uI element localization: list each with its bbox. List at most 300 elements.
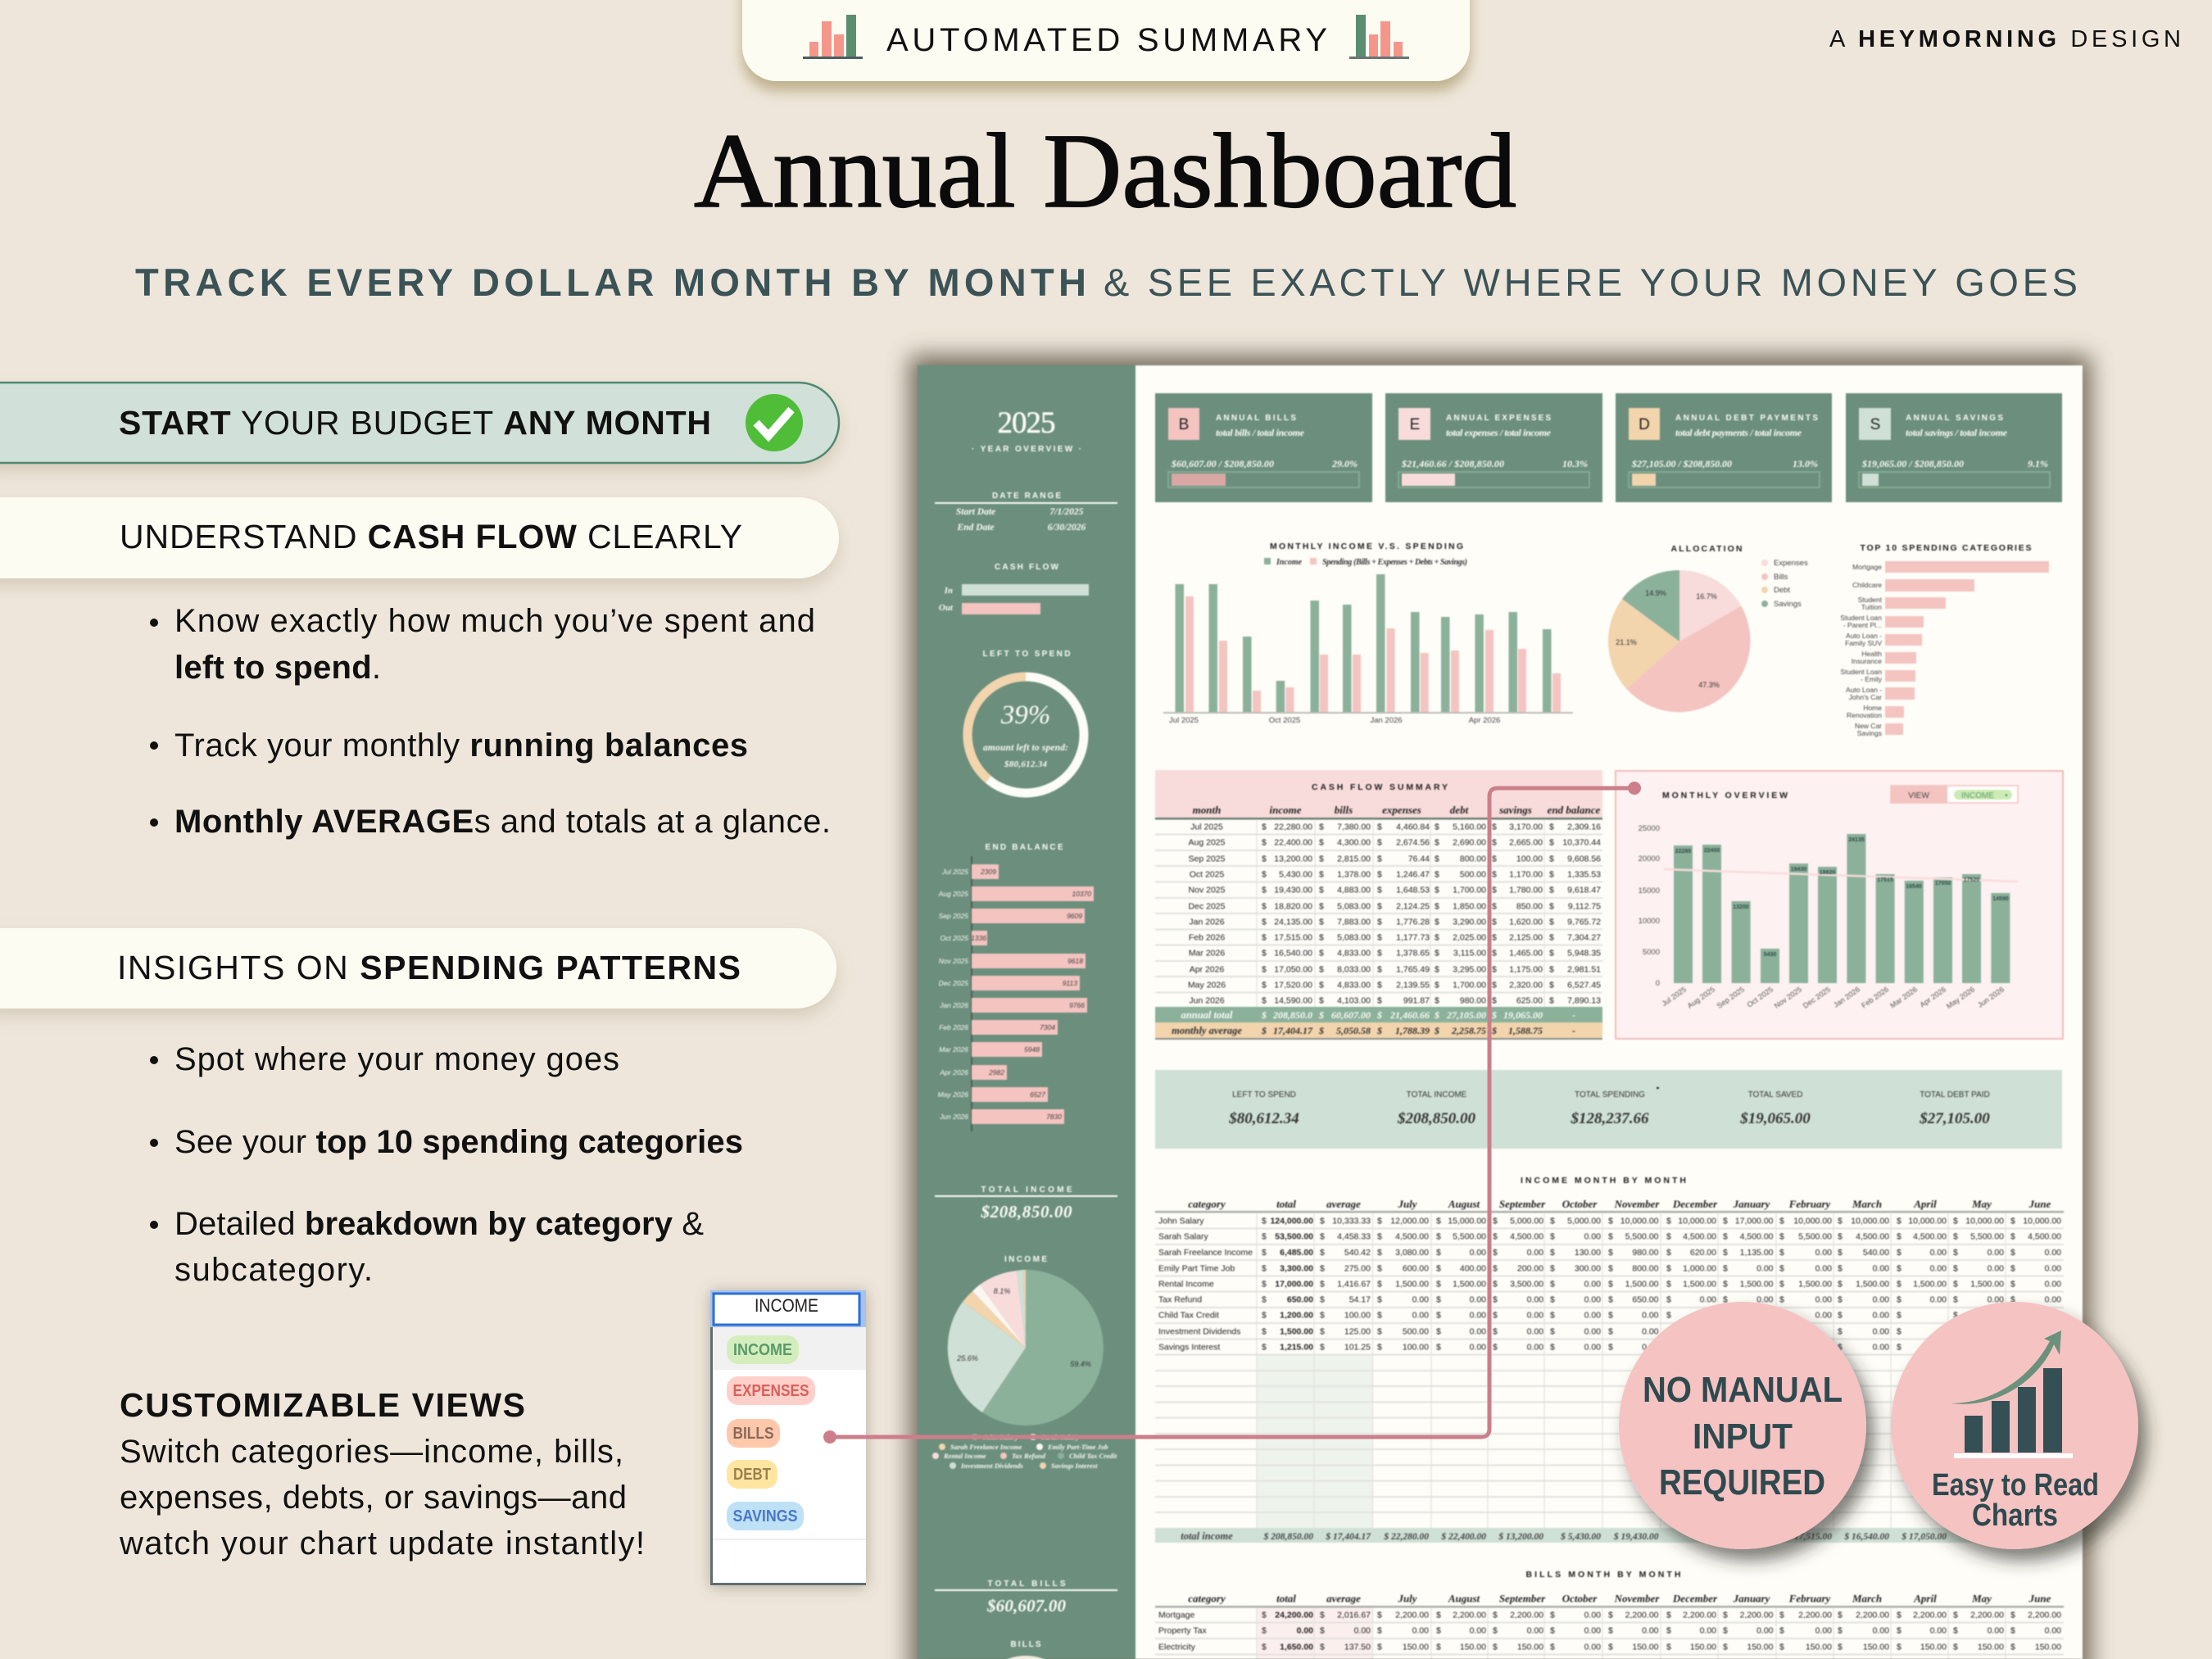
- table: cash flow summary: Mar 2026: [1189, 949, 1225, 959]
- badge: no manual input required: NO MANUAL: [1643, 1370, 1843, 1410]
- table: income month by month: 0.00: [1815, 1294, 1832, 1304]
- table: income month by month: 10,000.00: [1965, 1216, 2004, 1226]
- table: income month by month: 275.00: [1344, 1263, 1371, 1273]
- table: income month by month: 0.00: [1700, 1294, 1716, 1304]
- panel: totals band: TOTAL SAVED: [1748, 1090, 1802, 1099]
- chart: monthly overview: 5000: [1643, 948, 1660, 957]
- chart: top 10 spending categories: Family SUV: [1845, 639, 1882, 647]
- customizable views text: expenses, debts, or savings—and: [120, 1480, 627, 1516]
- table: income month by month: 1,200.00: [1280, 1311, 1313, 1321]
- chart: monthly overview: 14590: [1992, 896, 2009, 902]
- table: cash flow summary: $$$$$$: [1262, 870, 1554, 880]
- end balance bar chart: Apr 2026: [939, 1068, 968, 1077]
- table: cash flow summary: expenses: [1382, 804, 1421, 816]
- table: cash flow summary: 3,290.00: [1453, 918, 1486, 927]
- row: annual total: -: [1572, 1009, 1575, 1021]
- table: bills month by month: 0.00: [1584, 1642, 1601, 1652]
- bullet list: cash flow: [150, 603, 831, 840]
- chart: monthly overview: Feb 2026: [1860, 985, 1890, 1009]
- table: cash flow summary: 1,765.49: [1396, 965, 1430, 975]
- table: income month by month: August: [1448, 1198, 1480, 1210]
- chart: allocation pie: Savings: [1774, 600, 1802, 609]
- table: income month by month: 10,000.00: [2023, 1216, 2061, 1226]
- table: income month by month: 1,500.00: [1625, 1280, 1659, 1290]
- row: annual total: $$$$$: [1261, 1009, 1497, 1021]
- table: income month by month: 0.00: [1584, 1342, 1601, 1352]
- sidebar year heading: 2025: [998, 406, 1055, 440]
- table: income month by month: 1,500.00: [1970, 1280, 2004, 1290]
- table: bills month by month: 150.00: [1403, 1642, 1429, 1652]
- income pie legend: Savings Interest: [1051, 1462, 1098, 1470]
- table: cash flow summary: CASH FLOW SUMMARY: [1312, 782, 1448, 792]
- card: annual bills: $60,607.00 / $208,850.00: [1171, 458, 1274, 469]
- chart: top 10 spending categories: Student: [1858, 596, 1883, 604]
- sidebar year heading: · YEAR OVERVIEW ·: [972, 445, 1081, 454]
- table: bills month by month: 2,200.00: [2028, 1611, 2061, 1620]
- panel: totals band: $128,237.66: [1570, 1110, 1649, 1127]
- table: income month by month: Investment Dividends: [1158, 1327, 1240, 1337]
- customizable views text: [119, 1386, 645, 1562]
- table: income month by month: 5,500.00: [1625, 1232, 1659, 1242]
- table: cash flow summary: 980.00: [1460, 996, 1486, 1006]
- table: bills month by month: category: [1188, 1593, 1226, 1604]
- end balance bar chart: 9618: [1067, 957, 1083, 965]
- table: income month by month: $$$$$$$$$$$$$$: [1262, 1342, 2015, 1352]
- left to spend donut: LEFT TO SPEND: [983, 650, 1070, 659]
- subtitle: TRACK EVERY DOLLAR MONTH BY MONTH: [135, 261, 1086, 304]
- table: income month by month: 5,000.00: [1510, 1216, 1543, 1226]
- table: income month by month: 650.00: [1632, 1294, 1659, 1304]
- table: income month by month: average: [1326, 1198, 1361, 1210]
- card: annual bills: [1155, 393, 1372, 502]
- end balance bar chart: 2309: [980, 868, 996, 876]
- table: bills month by month: October: [1562, 1593, 1598, 1604]
- table: income month by month: 17,000.00: [1735, 1216, 1774, 1226]
- table: cash flow summary: 3,170.00: [1509, 823, 1543, 832]
- table: cash flow summary: 7,304.27: [1567, 932, 1601, 942]
- badge: no manual input required: INPUT: [1693, 1416, 1793, 1457]
- table: cash flow summary: 1,780.00: [1509, 885, 1543, 895]
- table: bills month by month: 0.00: [1756, 1625, 1774, 1635]
- table: cash flow summary: 1,170.00: [1509, 870, 1543, 880]
- table: cash flow summary: 100.00: [1516, 854, 1543, 863]
- total income: $208,850.00: [980, 1202, 1072, 1222]
- table: income month by month: 0.00: [1756, 1294, 1774, 1304]
- table: bills month by month: Property Tax: [1158, 1625, 1207, 1635]
- table: income month by month: [1155, 1176, 2064, 1543]
- table: cash flow summary: 800.00: [1460, 854, 1486, 863]
- chart: monthly overview: Oct 2025: [1745, 985, 1775, 1009]
- table: bills month by month: 0.00: [1815, 1625, 1832, 1635]
- table: bills month by month: 1,650.00: [1280, 1642, 1313, 1652]
- panel: totals band: $27,105.00: [1919, 1110, 1990, 1127]
- table: cash flow summary: $$$$$$: [1262, 932, 1554, 942]
- card: annual expenses: $21,460.66 / $208,850.00: [1401, 458, 1504, 469]
- table: income month by month: 0.00: [1930, 1263, 1947, 1273]
- table: cash flow summary: 2,815.00: [1337, 854, 1371, 863]
- card: annual savings: ANNUAL SAVINGS: [1906, 414, 2003, 423]
- table: cash flow summary: savings: [1498, 804, 1532, 816]
- table: income month by month: March: [1852, 1198, 1882, 1210]
- cash flow bars: CASH FLOW: [995, 563, 1059, 572]
- table: cash flow summary: May 2026: [1188, 980, 1226, 990]
- table: income month by month: 1,500.00: [1683, 1280, 1716, 1290]
- table: income month by month: 800.00: [1632, 1263, 1659, 1273]
- row: total income: $ 17,515.00: [1786, 1531, 1832, 1542]
- table: cash flow summary: 17,515.00: [1274, 932, 1312, 942]
- table: cash flow summary: 1,177.73: [1396, 932, 1430, 942]
- date range: 7/1/2025: [1050, 507, 1084, 517]
- table: income month by month: 10,000.00: [1793, 1216, 1832, 1226]
- table: cash flow summary: Sep 2025: [1189, 854, 1226, 863]
- table: income month by month: 130.00: [1575, 1248, 1601, 1258]
- table: cash flow summary: 1,246.47: [1396, 870, 1430, 880]
- row: total income: $ 208,850.00: [1263, 1531, 1313, 1542]
- table: cash flow summary: 3,295.00: [1453, 965, 1486, 975]
- pill: start your budget any month: [0, 383, 839, 463]
- income pie legend: [932, 1433, 1117, 1470]
- row: annual total: [1155, 1007, 1602, 1022]
- total bills: TOTAL BILLS: [988, 1580, 1066, 1589]
- chart: monthly overview: 17515: [1877, 877, 1893, 883]
- table: cash flow summary: 1,776.28: [1396, 918, 1430, 927]
- table: cash flow summary: Jun 2026: [1189, 996, 1225, 1006]
- table: income month by month: 0.00: [1470, 1342, 1486, 1352]
- card: annual debt payments: D: [1639, 416, 1650, 433]
- end balance bar chart: Jan 2026: [939, 1001, 968, 1009]
- table: bills month by month: total: [1276, 1593, 1296, 1604]
- chart: top 10 spending categories: [1840, 543, 2049, 737]
- chart: monthly overview: 10000: [1639, 917, 1660, 926]
- table: cash flow summary: [1155, 770, 1602, 1040]
- dropdown: customizable views: [710, 1290, 866, 1585]
- table: income month by month: 0.00: [1584, 1327, 1601, 1337]
- card: annual expenses: total expenses / total income: [1446, 427, 1552, 438]
- table: cash flow summary: end balance: [1548, 804, 1601, 816]
- row: monthly average: 1,588.75: [1508, 1025, 1543, 1036]
- table: cash flow summary: $$$$$$: [1262, 837, 1554, 847]
- table: income month by month: 5,500.00: [1970, 1232, 2004, 1242]
- table: bills month by month: 2,200.00: [1510, 1611, 1543, 1620]
- table: income month by month: 1,500.00: [1453, 1280, 1486, 1290]
- chart: allocation pie: Debt: [1774, 586, 1790, 595]
- table: bills month by month: $$$$$$$$$$$$$$: [1262, 1642, 2015, 1652]
- table: income month by month: $$$$$$$$$$$$$$: [1262, 1248, 2015, 1258]
- table: bills month by month: 150.00: [1806, 1642, 1832, 1652]
- table: income month by month: 0.00: [1584, 1280, 1601, 1290]
- table: cash flow summary: 9,765.72: [1567, 918, 1601, 927]
- table: cash flow summary: 5,948.35: [1567, 949, 1601, 959]
- table: cash flow summary: 2,309.16: [1567, 823, 1601, 832]
- end balance bar chart: Mar 2026: [939, 1045, 968, 1054]
- date range: DATE RANGE: [992, 492, 1061, 501]
- table: income month by month: 101.25: [1344, 1342, 1371, 1352]
- table: income month by month: $$$$$$$$$$$$$$: [1262, 1327, 2015, 1337]
- end balance bar chart: Aug 2025: [938, 890, 968, 898]
- table: cash flow summary: 9,618.47: [1567, 885, 1601, 895]
- table: income month by month: 650.00: [1287, 1294, 1313, 1304]
- chart: top 10 spending categories: Renovation: [1847, 711, 1882, 719]
- table: cash flow summary: 2,665.00: [1509, 837, 1543, 847]
- row: monthly average: 1,788.39: [1395, 1025, 1430, 1036]
- row: annual total: 21,460.66: [1389, 1009, 1430, 1021]
- table: income month by month: 400.00: [1460, 1263, 1486, 1273]
- date range: [935, 492, 1117, 533]
- total income: [935, 1185, 1117, 1222]
- icon: right bar chart: [1349, 15, 1409, 59]
- table: cash flow summary: 1,175.00: [1509, 965, 1543, 975]
- bullet list: spending: See your top 10 spending categories: [175, 1124, 743, 1160]
- row: total income: $ 17,050.00: [1901, 1531, 1947, 1542]
- table: bills month by month: December: [1672, 1593, 1718, 1604]
- arrow: connector from dropdown to monthly overview: [823, 782, 1641, 1444]
- table: cash flow summary: 9,608.56: [1567, 854, 1601, 863]
- table: income month by month: category: [1188, 1198, 1226, 1210]
- panel: totals band: TOTAL DEBT PAID: [1920, 1090, 1990, 1099]
- panel: totals band: TOTAL SPENDING: [1575, 1090, 1645, 1099]
- chart: top 10 spending categories: New Car: [1855, 722, 1882, 730]
- dropdown: view selector: [1891, 786, 2018, 803]
- table: cash flow summary: Jul 2025: [1190, 823, 1223, 832]
- table: cash flow summary: 4,833.00: [1337, 980, 1371, 990]
- table: cash flow summary: 7,883.00: [1337, 918, 1371, 927]
- date range: End Date: [956, 523, 995, 533]
- table: cash flow summary: 7,380.00: [1337, 823, 1371, 832]
- row: total income: [1155, 1528, 2064, 1543]
- table: income month by month: April: [1913, 1198, 1937, 1210]
- table: cash flow summary: 76.44: [1408, 854, 1430, 863]
- table: cash flow summary: 4,833.00: [1337, 949, 1371, 959]
- table: income month by month: 10,333.33: [1332, 1216, 1371, 1226]
- table: cash flow summary: $$$$$$: [1262, 965, 1554, 975]
- table: income month by month: 6,485.00: [1280, 1248, 1313, 1258]
- chart: top 10 spending categories: Student Loan: [1840, 668, 1882, 676]
- table: income month by month: 10,000.00: [1908, 1216, 1947, 1226]
- table: income month by month: $$$$$$$$$$$$$$: [1262, 1294, 2015, 1304]
- table: income month by month: 0.00: [1815, 1263, 1832, 1273]
- table: income month by month: February: [1788, 1198, 1831, 1210]
- table: income month by month: 15,000.00: [1448, 1216, 1486, 1226]
- option: expenses: [727, 1376, 815, 1405]
- table: income month by month: 0.00: [1527, 1294, 1543, 1304]
- chart: monthly overview: 25000: [1639, 824, 1660, 833]
- option: debt: [727, 1460, 777, 1489]
- dropdown: view selector: VIEW: [1908, 791, 1929, 800]
- cash flow bars: In: [944, 586, 953, 596]
- panel: totals band: LEFT TO SPEND: [1232, 1090, 1296, 1099]
- table: bills month by month: 0.00: [1527, 1625, 1543, 1635]
- table: income month by month: 0.00: [1642, 1342, 1659, 1352]
- row: total income: $ 22,400.00: [1440, 1531, 1486, 1542]
- title: Annual Dashboard: [694, 112, 1516, 230]
- table: income month by month: 0.00: [2045, 1263, 2061, 1273]
- chart: allocation pie: 16.7%: [1696, 592, 1717, 601]
- row: annual total: 208,850.0: [1272, 1009, 1312, 1021]
- chart: monthly overview: 19430: [1791, 867, 1806, 873]
- table: bills month by month: November: [1614, 1593, 1660, 1604]
- table: cash flow summary: 1,700.00: [1453, 980, 1486, 990]
- table: bills month by month: 2,016.67: [1337, 1611, 1371, 1620]
- chart: allocation pie: 47.3%: [1698, 681, 1720, 689]
- table: cash flow summary: $$$$$$: [1262, 980, 1554, 990]
- card: annual expenses: 10.3%: [1562, 458, 1588, 469]
- table: bills month by month: 150.00: [1920, 1642, 1947, 1652]
- table: income month by month: 125.00: [1344, 1327, 1371, 1337]
- left to spend donut: 39%: [1000, 700, 1050, 730]
- table: income month by month: 0.00: [1527, 1248, 1543, 1258]
- chart: top 10 spending categories: Student Loan: [1840, 614, 1882, 622]
- chart: allocation pie: 14.9%: [1645, 589, 1666, 597]
- chart: monthly overview: Mar 2026: [1888, 985, 1919, 1009]
- table: cash flow summary: 17,050.00: [1274, 965, 1312, 975]
- table: income month by month: 4,500.00: [1856, 1232, 1889, 1242]
- table: income month by month: 54.17: [1349, 1294, 1371, 1304]
- end balance bar chart: 6527: [1030, 1090, 1045, 1099]
- table: bills month by month: January: [1733, 1593, 1770, 1604]
- table: bills month by month: June: [2028, 1593, 2051, 1604]
- left to spend donut: [968, 650, 1084, 793]
- table: cash flow summary: 5,083.00: [1337, 901, 1371, 911]
- table: cash flow summary: 5,430.00: [1279, 870, 1312, 880]
- chart: top 10 spending categories: TOP 10 SPENDING CATEGORIES: [1860, 543, 2032, 553]
- card: annual bills: 29.0%: [1331, 458, 1358, 469]
- chart: monthly overview: MONTHLY OVERVIEW: [1662, 791, 1788, 800]
- table: bills month by month: 0.00: [1930, 1625, 1947, 1635]
- table: income month by month: INCOME MONTH BY MONTH: [1521, 1176, 1686, 1185]
- panel: totals band: $208,850.00: [1397, 1110, 1476, 1127]
- sidebar year heading: [972, 406, 1081, 454]
- option: expenses: EXPENSES: [732, 1382, 809, 1400]
- table: income month by month: Savings Interest: [1158, 1342, 1220, 1352]
- chart: top 10 spending categories: Auto Loan -: [1846, 686, 1882, 694]
- table: income month by month: 1,500.00: [1913, 1280, 1947, 1290]
- table: bills month by month: [1155, 1570, 2064, 1659]
- table: cash flow summary: 8,033.00: [1337, 965, 1371, 975]
- chart: monthly overview: 17520: [1964, 877, 1979, 883]
- table: income month by month: 4,500.00: [1740, 1232, 1774, 1242]
- table: cash flow summary: 4,103.00: [1337, 996, 1371, 1006]
- panel: totals band: TOTAL INCOME: [1407, 1090, 1467, 1099]
- table: income month by month: October: [1562, 1198, 1598, 1210]
- table: cash flow summary: 625.00: [1516, 996, 1543, 1006]
- table: income month by month: 0.00: [1527, 1311, 1543, 1321]
- table: income month by month: 1,135.00: [1740, 1248, 1774, 1258]
- table: bills month by month: BILLS MONTH BY MONTH: [1525, 1570, 1681, 1580]
- table: income month by month: December: [1672, 1198, 1718, 1210]
- table: income month by month: 0.00: [1412, 1294, 1429, 1304]
- table: income month by month: 4,500.00: [1510, 1232, 1543, 1242]
- table: bills month by month: 2,200.00: [1913, 1611, 1947, 1620]
- table: income month by month: 200.00: [1517, 1263, 1543, 1273]
- table: bills month by month: August: [1448, 1593, 1480, 1604]
- table: income month by month: $$$$$$$$$$$$$$: [1262, 1232, 2015, 1242]
- income pie legend: Child Tax Credit: [1069, 1452, 1117, 1460]
- income pie legend: Tax Refund: [1012, 1452, 1046, 1460]
- dashboard shadow: [909, 356, 2091, 1659]
- chart: monthly income vs spending: MONTHLY INCOME V.S. SPENDING: [1270, 542, 1463, 551]
- table: bills month by month: 150.00: [1460, 1642, 1486, 1652]
- table: cash flow summary: 3,115.00: [1453, 949, 1486, 959]
- table: income month by month: 3,300.00: [1280, 1263, 1313, 1273]
- table: bills month by month: 150.00: [1690, 1642, 1716, 1652]
- row: total income: $ 17,404.17: [1325, 1531, 1371, 1542]
- chart: allocation pie: [1608, 544, 1808, 712]
- table: income month by month: 5,500.00: [1798, 1232, 1832, 1242]
- table: income month by month: Tax Refund: [1158, 1294, 1202, 1304]
- table: cash flow summary: $$$$$$: [1262, 949, 1554, 959]
- chart: monthly overview: Dec 2025: [1802, 985, 1832, 1010]
- card: annual savings: $19,065.00 / $208,850.00: [1861, 458, 1964, 469]
- table: cash flow summary: Apr 2026: [1190, 965, 1224, 975]
- table: income month by month: 124,000.00: [1270, 1216, 1313, 1226]
- table: income month by month: 0.00: [2045, 1294, 2061, 1304]
- bullet list: cash flow: Track your monthly running balances: [175, 728, 748, 764]
- table: income month by month: 10,000.00: [1678, 1216, 1716, 1226]
- chart: monthly overview: Apr 2026: [1918, 985, 1947, 1009]
- table: cash flow summary: 2,674.56: [1396, 837, 1430, 847]
- chart: top 10 spending categories: Mortgage: [1852, 563, 1882, 571]
- chart: monthly income vs spending: Apr 2026: [1469, 716, 1500, 725]
- table: bills month by month: 0.00: [2045, 1625, 2061, 1635]
- badge label: AUTOMATED SUMMARY: [886, 22, 1327, 58]
- income pie legend: Investment Dividends: [960, 1462, 1023, 1470]
- table: bills month by month: 2,200.00: [1453, 1611, 1486, 1620]
- table: income month by month: July: [1397, 1198, 1417, 1210]
- end balance bar chart: 5948: [1024, 1045, 1040, 1054]
- option: savings: [727, 1502, 804, 1530]
- table: cash flow summary: 850.00: [1516, 901, 1543, 911]
- table: income month by month: 53,500.00: [1275, 1232, 1313, 1242]
- row: monthly average: 5,050.58: [1336, 1025, 1371, 1036]
- bullet list: cash flow: left to spend.: [175, 650, 381, 686]
- table: cash flow summary: 18,820.00: [1274, 901, 1312, 911]
- income pie chart: 8.1%: [994, 1287, 1010, 1295]
- table: cash flow summary: 24,135.00: [1274, 918, 1312, 927]
- pill: understand cash flow clearly: UNDERSTAND CASH FLOW CLEARLY: [120, 518, 742, 555]
- table: income month by month: 0.00: [1527, 1327, 1543, 1337]
- table: cash flow summary: $$$$$$: [1262, 996, 1554, 1006]
- table: income month by month: Sarah Salary: [1158, 1232, 1208, 1242]
- table: bills month by month: 150.00: [2035, 1642, 2061, 1652]
- table: income month by month: 1,500.00: [1798, 1280, 1832, 1290]
- end balance bar chart: Feb 2026: [939, 1023, 968, 1031]
- chart: monthly overview: Jan 2026: [1832, 985, 1861, 1009]
- chart: monthly overview: Sep 2025: [1716, 985, 1746, 1010]
- table: income month by month: 620.00: [1690, 1248, 1716, 1258]
- table: cash flow summary: Oct 2025: [1190, 870, 1224, 880]
- dropdown header: [710, 1290, 866, 1327]
- end balance bar chart: Sep 2025: [939, 912, 968, 920]
- pill: start your budget any month: START YOUR BUDGET ANY MONTH: [119, 404, 711, 442]
- cash flow bars: [939, 563, 1089, 614]
- table: income month by month: 0.00: [1815, 1311, 1832, 1321]
- end balance bar chart: 7304: [1040, 1023, 1055, 1031]
- table: cash flow summary: $$$$$$: [1262, 918, 1554, 927]
- card: annual savings: total savings / total income: [1906, 427, 2008, 438]
- table: income month by month: January: [1733, 1198, 1770, 1210]
- table: cash flow summary: 17,520.00: [1274, 980, 1312, 990]
- table: income month by month: 0.00: [1756, 1263, 1774, 1273]
- table: income month by month: 4,500.00: [1683, 1232, 1716, 1242]
- badge: no manual input required: REQUIRED: [1659, 1462, 1825, 1503]
- table: income month by month: 980.00: [1632, 1248, 1659, 1258]
- chart: monthly overview: 0: [1656, 979, 1660, 988]
- table: income month by month: 0.00: [1584, 1311, 1601, 1321]
- table: income month by month: 4,458.33: [1337, 1232, 1371, 1242]
- option: income: INCOME: [733, 1341, 792, 1359]
- income pie chart: 59.4%: [1070, 1360, 1091, 1368]
- table: cash flow summary: month: [1193, 804, 1221, 816]
